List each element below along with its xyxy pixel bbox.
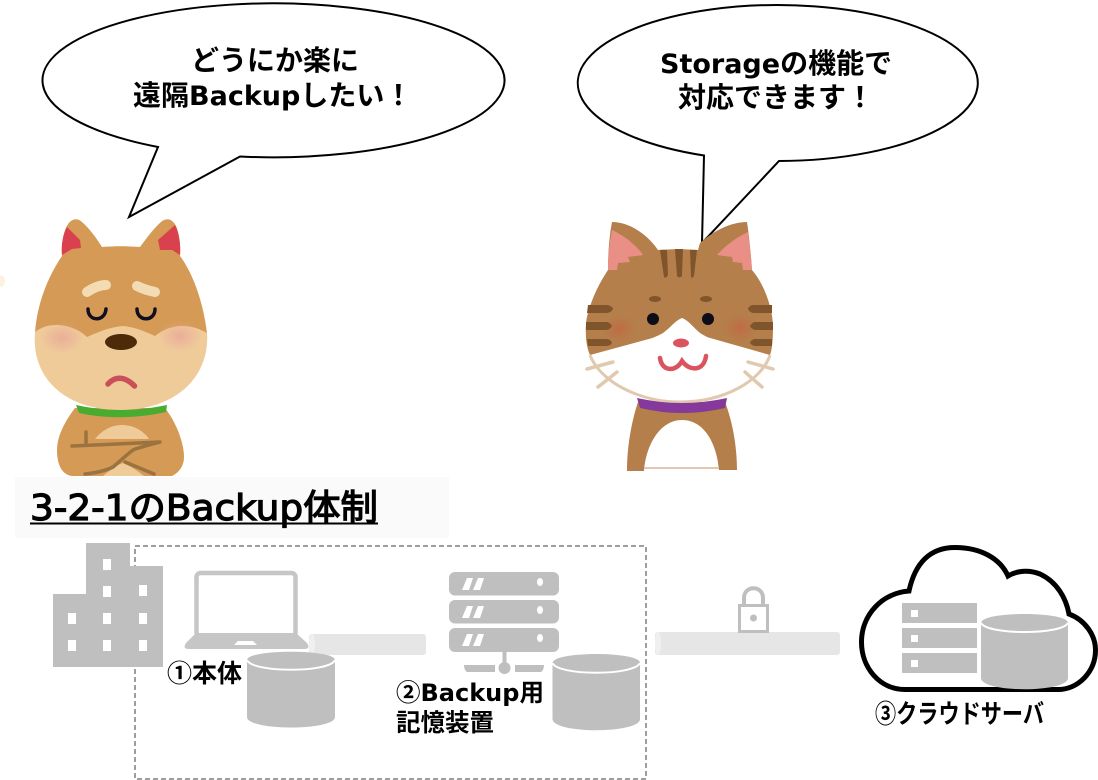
speech bubble: dog — [42, 3, 504, 217]
heading panel — [15, 477, 449, 538]
speech bubble: cat — [578, 5, 978, 243]
label: backup storage — [396, 679, 544, 737]
label: backup storage: ②Backup用 — [396, 679, 544, 707]
label: cloud server: ③クラウドサーバ — [875, 699, 1044, 729]
icon: laptop — [185, 573, 308, 649]
icon: cloud server — [862, 548, 1096, 690]
icon: padlock — [740, 588, 768, 632]
dashed boundary: on-site — [135, 546, 646, 779]
icon: office building — [53, 543, 163, 667]
speech bubble: cat: Storageの機能で — [660, 47, 892, 80]
speech bubble: dog: 遠隔Backupしたい！ — [133, 80, 412, 112]
decorative speck at left edge — [0, 275, 5, 287]
illustration: worried dog — [35, 219, 207, 476]
label: backup storage: 記憶装置 — [396, 709, 494, 737]
speech bubble: dog: どうにか楽に — [191, 45, 359, 76]
icon: backup server — [449, 572, 559, 674]
illustration: smiling cat — [586, 222, 773, 471]
icon: disk for main unit — [247, 652, 335, 728]
connection pipe: remote — [655, 632, 840, 655]
icon: disk for backup storage — [552, 654, 640, 730]
heading panel: 3-2-1のBackup体制 — [30, 488, 378, 529]
speech bubble: cat: 対応できます！ — [678, 82, 874, 113]
label: main unit: ①本体 — [167, 660, 242, 688]
connection pipe: local — [309, 634, 426, 655]
